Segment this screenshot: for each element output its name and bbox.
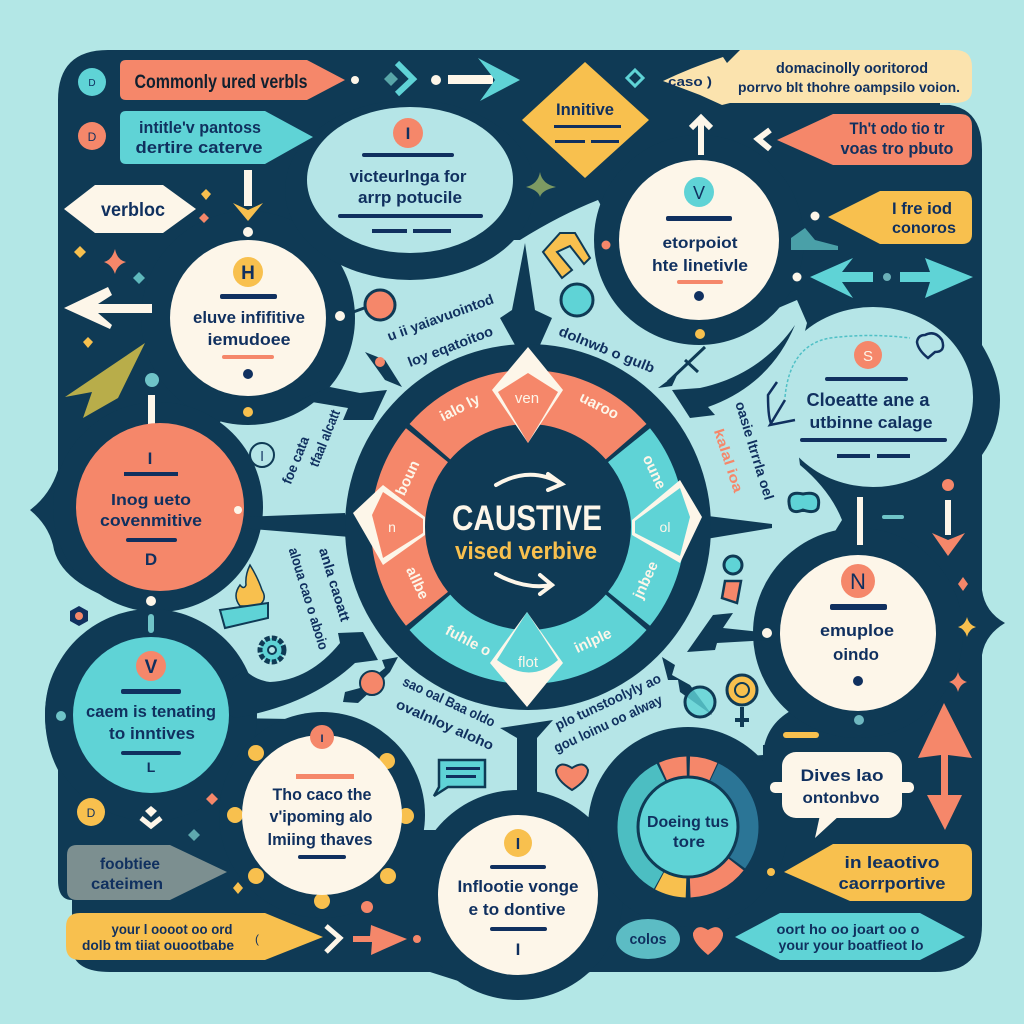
top left banners (64, 60, 345, 233)
icon: target arrow upper left (345, 290, 395, 320)
icon: coral target arrow (343, 657, 398, 703)
bottom right chips: oort ho oo joart oo o (776, 921, 920, 937)
node: H circle (170, 240, 326, 396)
neck dot (146, 596, 156, 633)
interior rotated captions: dolnwb o gulb (557, 323, 657, 376)
bottom diamond: flot (518, 654, 539, 671)
center title: vised verbive (455, 538, 597, 565)
lower left icons (77, 793, 373, 913)
node: bottom I circle: I (516, 940, 520, 959)
grey banner: foobtiee (100, 856, 160, 873)
node: V top circle: hte linetivle (652, 256, 748, 275)
dark rings around the circular nodes (45, 100, 963, 1000)
node: H circle: H (241, 263, 255, 284)
top arrows (351, 58, 520, 101)
node: cream circle with dots: lmiing thaves (268, 830, 372, 849)
ring segment labels (392, 389, 669, 660)
icon: crossed arrow (658, 347, 705, 388)
node: bottom I circle: e to dontive (468, 900, 566, 919)
donut chart: tore (673, 834, 705, 851)
node: coral circle: I (148, 449, 152, 468)
top right banners: voas tro pbuto (840, 139, 954, 158)
yellow bottom banner (66, 913, 323, 960)
interior rotated captions: ovalnloy aloho (394, 696, 496, 753)
small arrows top right (526, 70, 973, 298)
speech bubble: Dives lao (800, 766, 884, 785)
node: bottom I circle: I (516, 836, 520, 853)
interior rotated captions: foe cata (279, 434, 312, 486)
bottom right chips: your your boatfieot lo (778, 937, 924, 953)
ring segment labels: jnbee (630, 559, 662, 602)
left arrow (64, 287, 152, 329)
interior rotated captions: plo tunstoolyly ao (552, 670, 663, 733)
node: top ellipse: victeurlnga for (350, 167, 467, 186)
node: N circle: N (850, 569, 866, 594)
node: V teal circle: V (145, 657, 158, 678)
top right banners: Th't odo tio tr (850, 119, 945, 138)
top right banners: domacinolly ooritorod (776, 60, 928, 77)
interior rotated captions: aloua cao o aboio (286, 546, 332, 652)
node: top ellipse: arrp potucile (358, 188, 462, 207)
top left banners: D (88, 78, 96, 89)
light interior region (150, 200, 842, 847)
bottom right chips (616, 913, 965, 960)
bottom diamond (490, 612, 563, 707)
down arrow and dots (74, 170, 345, 348)
top right banners: porrvo blt thohre oampsilo voion. (738, 79, 960, 95)
node: cream circle with dots: Tho caco the (272, 785, 372, 804)
interior rotated captions: gou loinu oo alway (551, 691, 665, 756)
icon: circle badge (250, 443, 274, 467)
node: V teal circle: to inntives (109, 724, 195, 743)
lower left icons: D (87, 806, 96, 820)
top left banners: Commonly ured verbls (134, 72, 308, 93)
yellow bottom banner: ( (255, 932, 259, 946)
node: bottom I circle (438, 815, 598, 975)
yellow banner lower right (767, 844, 972, 901)
grey banner (67, 845, 227, 900)
top left banners: verbloc (101, 200, 165, 221)
node: S ellipse (768, 307, 973, 487)
interior rotated captions: oasie ltrrrla oel (732, 399, 777, 502)
right side arrows and stars (783, 479, 976, 738)
icon: cloud (789, 493, 819, 512)
node: V top circle: V (693, 183, 705, 203)
icon: gear (260, 638, 284, 662)
top diamond: ven (515, 390, 539, 407)
ring segment labels: inlple (572, 625, 614, 657)
node: bottom I circle: Inflootie vonge (458, 877, 578, 896)
interior rotated captions: u ii yaiavuointod (385, 291, 496, 344)
ring segment labels: allbe (402, 564, 432, 602)
yellow banner lower right: in leaotivo (844, 853, 940, 872)
connector arrows and spikes (200, 243, 795, 800)
interior rotated captions: tfaal alcatt (306, 407, 343, 469)
interior rotated captions (279, 291, 777, 756)
bottom arrows (326, 925, 421, 955)
node: N circle: emuploe (820, 621, 894, 640)
right diamond (632, 480, 702, 563)
icon: message bubble (434, 760, 485, 796)
node: top ellipse: I (406, 124, 410, 143)
icon: ribbon (722, 556, 742, 603)
left diamond: n (388, 519, 396, 535)
icon: circle badge: l (260, 448, 264, 464)
interior rotated captions: loy eqatoitoo (405, 323, 495, 370)
ring segment labels: ialo ly (437, 390, 483, 425)
center title: CAUSTIVE (452, 499, 602, 538)
interior rotated captions: sao oal Baa oldo (400, 673, 498, 730)
node: H circle: iemudoee (208, 330, 290, 349)
node: coral circle (76, 423, 244, 591)
top left banners: D (88, 130, 97, 144)
node: N circle: oindo (833, 645, 879, 664)
grey banner: cateimen (91, 876, 163, 893)
node: H circle: eluve infifitive (193, 308, 305, 327)
interior icons (220, 233, 819, 796)
dots above coral node (145, 373, 253, 424)
node: S ellipse: Cloeatte ane a (806, 390, 930, 410)
node: cream circle with dots (227, 725, 414, 909)
yellow bottom banner: dolb tm tiiat ouootbabe (82, 937, 234, 953)
right diamond: ol (660, 519, 670, 535)
node: cream circle with dots: v'ipoming alo (270, 807, 372, 826)
donut chart: Doeing tus (647, 814, 729, 831)
node: coral circle: Inog ueto (111, 492, 191, 509)
node: coral circle: covenmitive (100, 511, 202, 530)
olive arrow icon (65, 343, 145, 418)
node: V teal circle: caem is tenating (86, 702, 216, 721)
speech bubble (770, 752, 914, 838)
node: S ellipse: S (863, 348, 873, 365)
icon: yellow pin (727, 675, 757, 727)
top right banners: I fre iod (892, 199, 952, 218)
yellow diamond: Innitive (556, 100, 614, 119)
central wheel (345, 344, 711, 710)
coral double arrow (918, 703, 972, 830)
yellow bottom banner: your l oooot oo ord (112, 921, 232, 937)
node: N circle (762, 555, 936, 725)
top right banners: caso ) (668, 74, 712, 89)
node: V top circle (602, 160, 779, 339)
icon: pin arrow (365, 352, 402, 387)
donut chart (628, 767, 748, 887)
icon: flame (220, 565, 268, 628)
node: cream circle with dots: I (320, 733, 324, 745)
icon: bent arrow (543, 233, 593, 316)
node: V top circle: etorpoiot (662, 235, 738, 252)
top left banners: dertire caterve (136, 138, 262, 157)
node: S ellipse: utbinne calage (810, 413, 932, 432)
ring segment labels: uaroo (577, 389, 621, 423)
bottom right chips: colos (630, 931, 666, 948)
speech bubble: ontonbvo (802, 790, 880, 807)
top right banners (663, 50, 972, 244)
ring segment labels: fuhle o (442, 622, 494, 660)
node: coral circle: D (145, 550, 157, 569)
left diamond (353, 485, 425, 565)
interior rotated captions: kalal ioa (711, 427, 747, 495)
icon: gear star (70, 606, 88, 626)
node: V teal circle (56, 637, 229, 793)
node: top ellipse (307, 107, 513, 253)
ring segment labels: oune (639, 452, 669, 492)
top diamond (492, 347, 563, 443)
center title (452, 474, 602, 594)
icon: arrow with teal circle (662, 657, 715, 717)
icon: heart (556, 764, 588, 790)
top right banners: conoros (892, 220, 956, 237)
node: V teal circle: L (147, 759, 156, 775)
top left banners: intitle'v pantoss (139, 118, 261, 137)
yellow diamond (522, 62, 649, 178)
yellow banner lower right: caorrportive (838, 874, 946, 893)
ring segment labels: boun (392, 458, 423, 498)
interior rotated captions: anla caoatt (316, 546, 354, 624)
